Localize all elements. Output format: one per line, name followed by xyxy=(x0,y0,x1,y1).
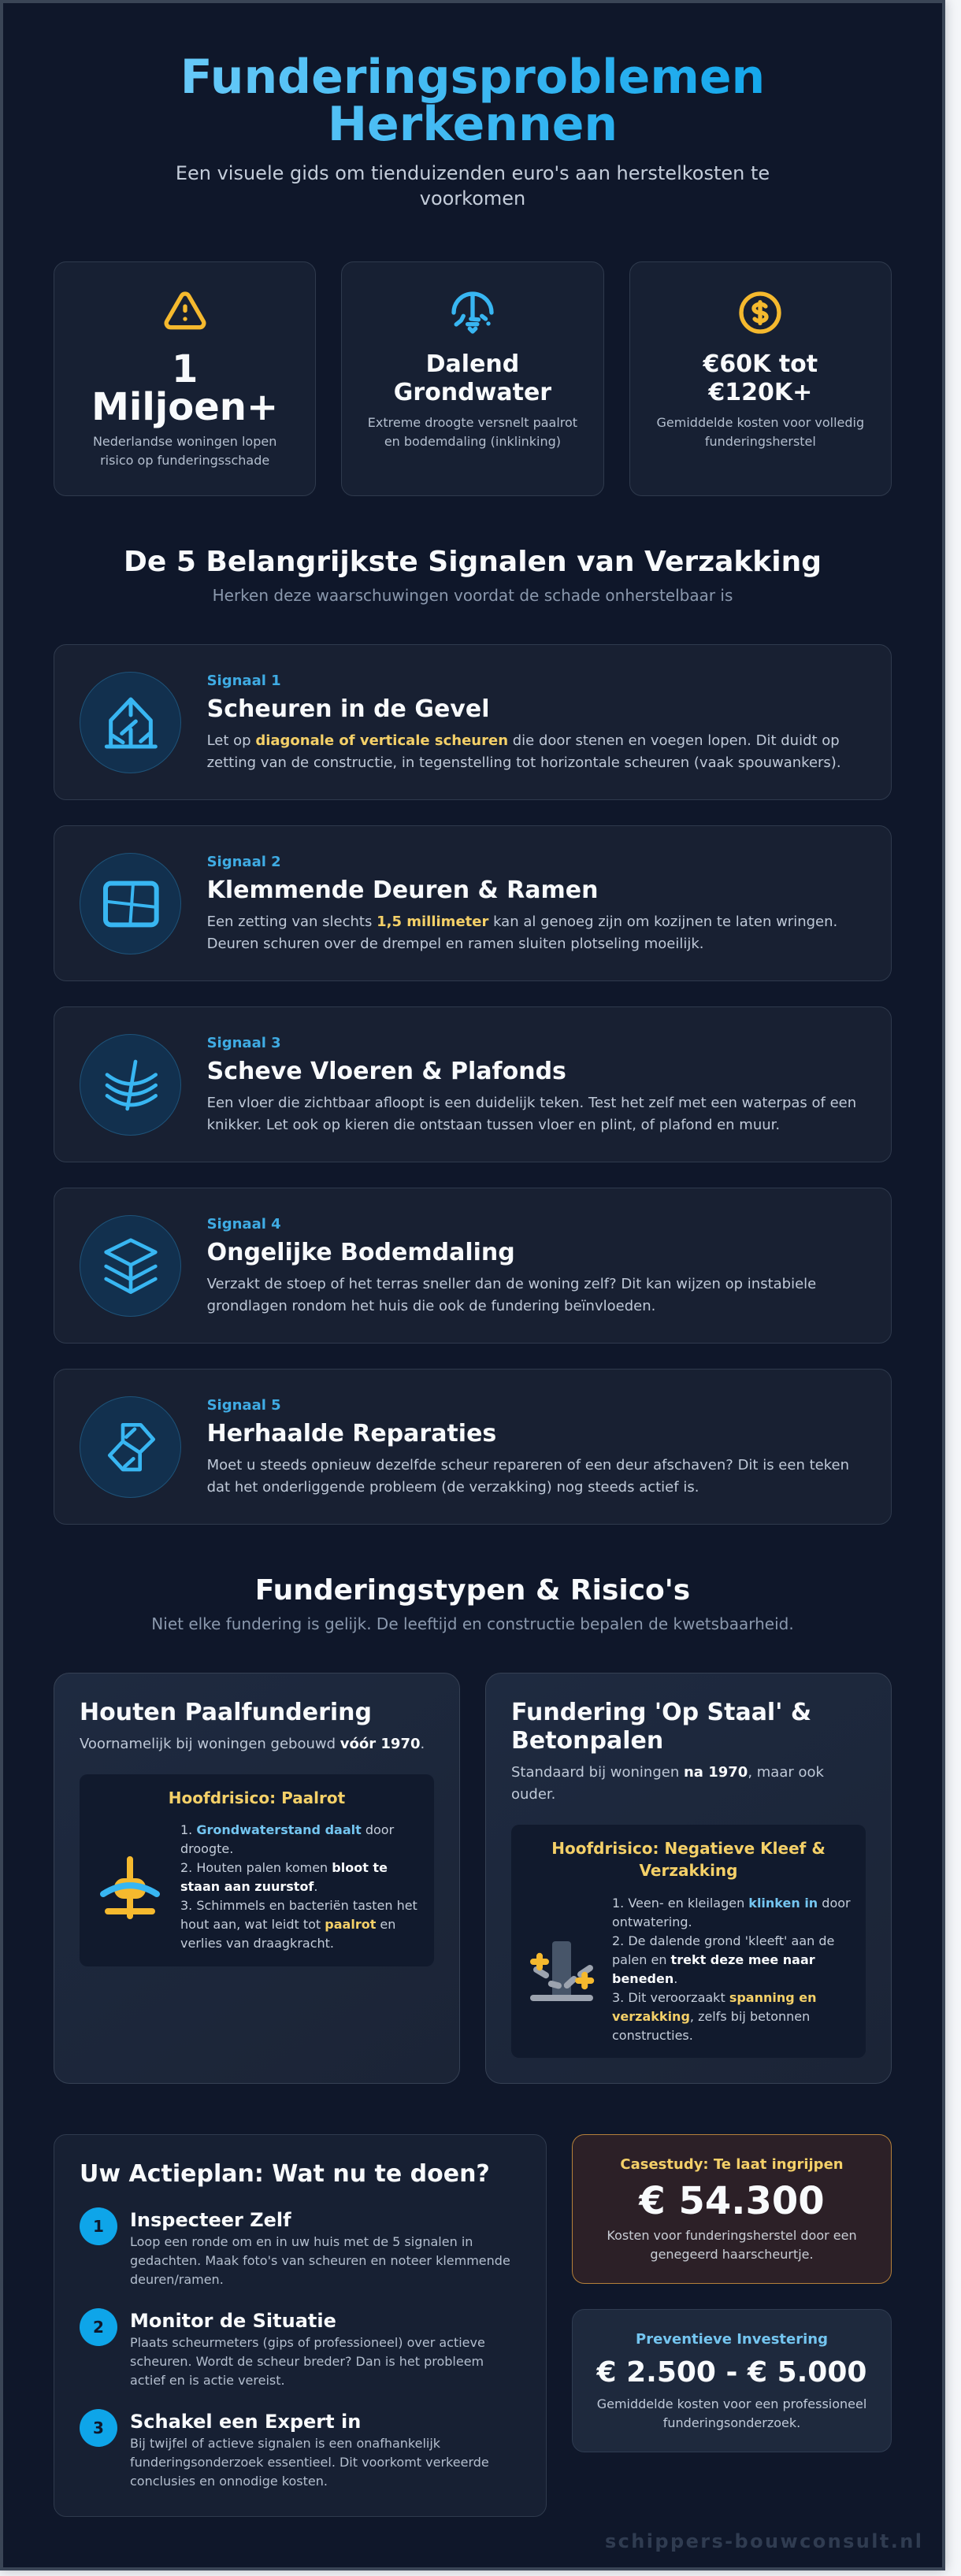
text: signaal 5: Moet u steeds opnieuw dezelfde scheur repareren of een deur afschaven? Dit is een teken xyxy=(207,1457,849,1473)
step 2 xyxy=(80,2308,485,2388)
stat description: risico op funderingsschade xyxy=(100,453,269,468)
icon: concrete pile with soil xyxy=(530,1941,594,2001)
panel: fundering op staal xyxy=(485,1673,892,2084)
card intro xyxy=(511,1764,824,1803)
text: signaal 3: knikker. Let ook op kieren die ontstaan tussen vloer en plint, of plafond en muur. xyxy=(207,1117,780,1133)
text: signaal 2 xyxy=(207,854,837,952)
stat value: Dalend xyxy=(426,350,519,378)
stat description xyxy=(93,434,276,468)
stat value: 1 xyxy=(172,347,198,391)
text: signaal 1 xyxy=(207,673,841,771)
callout text xyxy=(607,2228,857,2262)
stat description: Extreme droogte versnelt paalrot xyxy=(368,415,577,430)
watermark: schippers-bouwconsult.nl xyxy=(605,2530,923,2552)
step 1: gedachten. Maak foto's van scheuren en noteer klemmende xyxy=(130,2253,510,2268)
text: signaal 5 xyxy=(207,1397,849,1496)
risk heading: Hoofdrisico: Negatieve Kleef & xyxy=(551,1839,826,1858)
risk heading xyxy=(551,1839,826,1880)
callout label: Preventieve Investering xyxy=(636,2331,828,2348)
risk box: negatieve kleef xyxy=(511,1825,866,2058)
step 2: Monitor de Situatie xyxy=(130,2310,336,2332)
stat value: Grondwater xyxy=(394,379,551,406)
callout text: funderingsonderzoek. xyxy=(663,2415,800,2430)
risk explanation: hout aan, wat leidt tot paalrot en xyxy=(180,1917,395,1932)
step 3: Bij twijfel of actieve signalen is een onafhankelijk xyxy=(130,2436,440,2451)
risk heading: Verzakking xyxy=(640,1861,737,1880)
callout: preventieve investering xyxy=(572,2309,892,2452)
stat card: dalend grondwater xyxy=(341,261,604,496)
step 1: Loop een ronde om en in uw huis met de 5 signalen in xyxy=(130,2234,473,2249)
subheading: funderingstypen: Niet elke fundering is gelijk. De leeftijd en constructie bepalen de kwetsbaarheid. xyxy=(151,1614,794,1633)
card heading: Fundering 'Op Staal' & xyxy=(511,1699,811,1726)
callout amount: € 2.500 - € 5.000 xyxy=(597,2356,866,2389)
icon: falling groundwater xyxy=(451,291,494,334)
panel: signaal 4 xyxy=(54,1188,892,1344)
risk explanation: palen en trekt deze mee naar xyxy=(612,1952,815,1967)
icon: soil layers xyxy=(80,1215,181,1317)
icon: warning triangle xyxy=(164,291,206,329)
icon: wooden pile and water xyxy=(100,1856,160,1919)
text: signaal 4 xyxy=(206,1216,816,1314)
text: signaal 1: Let op diagonale of verticale scheuren die door stenen en voegen lopen. Dit duidt op xyxy=(207,732,840,749)
step 2: actief en is actie vereist. xyxy=(130,2373,285,2388)
step 3: funderingsonderzoek essentieel. Dit voorkomt verkeerde xyxy=(130,2455,489,2470)
callout text: Gemiddelde kosten voor een professioneel xyxy=(597,2396,866,2411)
risk explanation: 3. Schimmels en bacteriën tasten het xyxy=(180,1898,417,1913)
callout: casestudy xyxy=(572,2134,892,2284)
step 1: deuren/ramen. xyxy=(130,2272,224,2287)
stat value xyxy=(394,350,551,406)
step 3: 3 xyxy=(93,2418,104,2437)
text: signaal 3 xyxy=(207,1035,856,1133)
text: signaal 2: Een zetting van slechts 1,5 millimeter kan al genoeg zijn om kozijnen te laten wringen. xyxy=(207,914,837,930)
risk explanation: droogte. xyxy=(180,1841,233,1856)
text: signaal 1: Signaal 1 xyxy=(207,673,281,689)
heading: funderingstypen: Funderingstypen & Risico's xyxy=(255,1574,690,1607)
text: signaal 4: Verzakt de stoep of het terras sneller dan de woning zelf? Dit kan wijzen op instabiele xyxy=(207,1276,816,1292)
subheading: signalen: Herken deze waarschuwingen voordat de schade onherstelbaar is xyxy=(213,586,733,605)
risk explanation: constructies. xyxy=(612,2028,693,2043)
step 3: Schakel een Expert in xyxy=(130,2411,361,2433)
text: signaal 4: grondlagen rondom het huis die ook de fundering beïnvloeden. xyxy=(207,1298,655,1314)
card heading: Betonpalen xyxy=(511,1727,663,1755)
stat description: funderingsherstel xyxy=(705,434,816,449)
icon: warped window xyxy=(80,853,181,954)
step 2: Plaats scheurmeters (gips of professioneel) over actieve xyxy=(130,2335,485,2350)
panel: actieplan xyxy=(54,2134,547,2517)
stat description: Nederlandse woningen lopen xyxy=(93,434,276,449)
step 1 xyxy=(80,2207,510,2287)
callout amount: € 54.300 xyxy=(639,2179,825,2223)
card heading xyxy=(511,1699,811,1755)
subtitle: voorkomen xyxy=(420,187,525,209)
panel: signaal 1 xyxy=(54,644,892,800)
icon: repeated repair xyxy=(80,1396,181,1498)
text: signaal 2: Deuren schuren over de drempel en ramen sluiten plotseling moeilijk. xyxy=(207,936,704,952)
risk box: paalrot xyxy=(80,1774,434,1966)
step 2: 2 xyxy=(93,2318,104,2337)
stat value: Miljoen+ xyxy=(91,385,278,429)
stat description xyxy=(657,415,864,449)
callout label: Casestudy: Te laat ingrijpen xyxy=(620,2156,844,2173)
card intro: Voornamelijk bij woningen gebouwd vóór 1970. xyxy=(80,1736,425,1752)
step 3 xyxy=(80,2409,489,2489)
stat value xyxy=(703,350,818,406)
text: signaal 5: Signaal 5 xyxy=(207,1397,281,1414)
title: Funderingsproblemen xyxy=(180,50,765,105)
title xyxy=(180,50,765,152)
risk heading: Hoofdrisico: Paalrot xyxy=(169,1788,345,1807)
icon: cracked house xyxy=(80,672,181,773)
risk explanation: beneden. xyxy=(612,1971,677,1986)
step 1: Inspecteer Zelf xyxy=(130,2209,291,2231)
card heading: Houten Paalfundering xyxy=(80,1699,372,1726)
risk explanation: ontwatering. xyxy=(612,1914,692,1929)
risk explanation: 2. De dalende grond 'kleeft' aan de xyxy=(612,1933,834,1948)
stat description xyxy=(368,415,577,449)
text: signaal 3: Signaal 3 xyxy=(207,1035,281,1051)
stat card: 1 miljoen xyxy=(54,261,316,496)
stat description: Gemiddelde kosten voor volledig xyxy=(657,415,864,430)
panel: signaal 5 xyxy=(54,1369,892,1525)
step 3: conclusies en onnodige kosten. xyxy=(130,2474,328,2489)
stat value: €120K+ xyxy=(708,379,812,406)
callout text xyxy=(597,2396,866,2430)
card intro: Standaard bij woningen na 1970, maar ook xyxy=(511,1764,824,1781)
panel: houten paalfundering xyxy=(54,1673,460,2084)
callout text: Kosten voor funderingsherstel door een xyxy=(607,2228,857,2243)
text: signaal 1: zetting van de constructie, in tegenstelling tot horizontale scheuren (vaak spouwankers). xyxy=(207,754,841,771)
icon: sagging floors xyxy=(80,1034,181,1136)
risk explanation: staan aan zuurstof. xyxy=(180,1879,317,1894)
risk explanation xyxy=(612,1896,851,2043)
title: Herkennen xyxy=(328,97,618,152)
stat value: €60K tot xyxy=(703,350,818,378)
stat card: kosten xyxy=(629,261,892,496)
risk explanation xyxy=(180,1822,417,1951)
card intro: ouder. xyxy=(511,1786,555,1803)
heading: signalen: De 5 Belangrijkste Signalen van Verzakking xyxy=(124,546,822,578)
risk explanation: 1. Grondwaterstand daalt door xyxy=(180,1822,394,1837)
callout text: genegeerd haarscheurtje. xyxy=(650,2247,814,2262)
panel: signaal 3 xyxy=(54,1006,892,1162)
text: signaal 5: Herhaalde Reparaties xyxy=(207,1420,496,1447)
text: signaal 2: Signaal 2 xyxy=(207,854,281,870)
subtitle xyxy=(176,162,770,209)
action plan heading: Uw Actieplan: Wat nu te doen? xyxy=(80,2160,490,2188)
stat description: en bodemdaling (inklinking) xyxy=(384,434,561,449)
text: signaal 4: Signaal 4 xyxy=(207,1216,281,1232)
text: signaal 4: Ongelijke Bodemdaling xyxy=(207,1239,515,1266)
icon: dollar coin xyxy=(739,291,781,334)
text: signaal 5: dat het onderliggende probleem (de verzakking) nog steeds actief is. xyxy=(207,1479,699,1496)
risk explanation: verzakking, zelfs bij betonnen xyxy=(612,2009,810,2024)
risk explanation: 2. Houten palen komen bloot te xyxy=(180,1860,388,1875)
subtitle: Een visuele gids om tienduizenden euro's aan herstelkosten te xyxy=(176,162,770,184)
risk explanation: 1. Veen- en kleilagen klinken in door xyxy=(612,1896,851,1911)
step 1: 1 xyxy=(93,2217,104,2236)
risk explanation: verlies van draagkracht. xyxy=(180,1936,334,1951)
text: signaal 1: Scheuren in de Gevel xyxy=(207,695,490,723)
text: signaal 2: Klemmende Deuren & Ramen xyxy=(207,877,598,904)
risk explanation: 3. Dit veroorzaakt spanning en xyxy=(612,1990,817,2005)
step 2: scheuren. Wordt de scheur breder? Dan is het probleem xyxy=(130,2354,484,2369)
text: signaal 3: Scheve Vloeren & Plafonds xyxy=(207,1058,566,1085)
panel: signaal 2 xyxy=(54,825,892,981)
stat value xyxy=(91,347,278,429)
text: signaal 3: Een vloer die zichtbaar afloopt is een duidelijk teken. Test het zelf met een waterpas of een xyxy=(207,1095,856,1111)
